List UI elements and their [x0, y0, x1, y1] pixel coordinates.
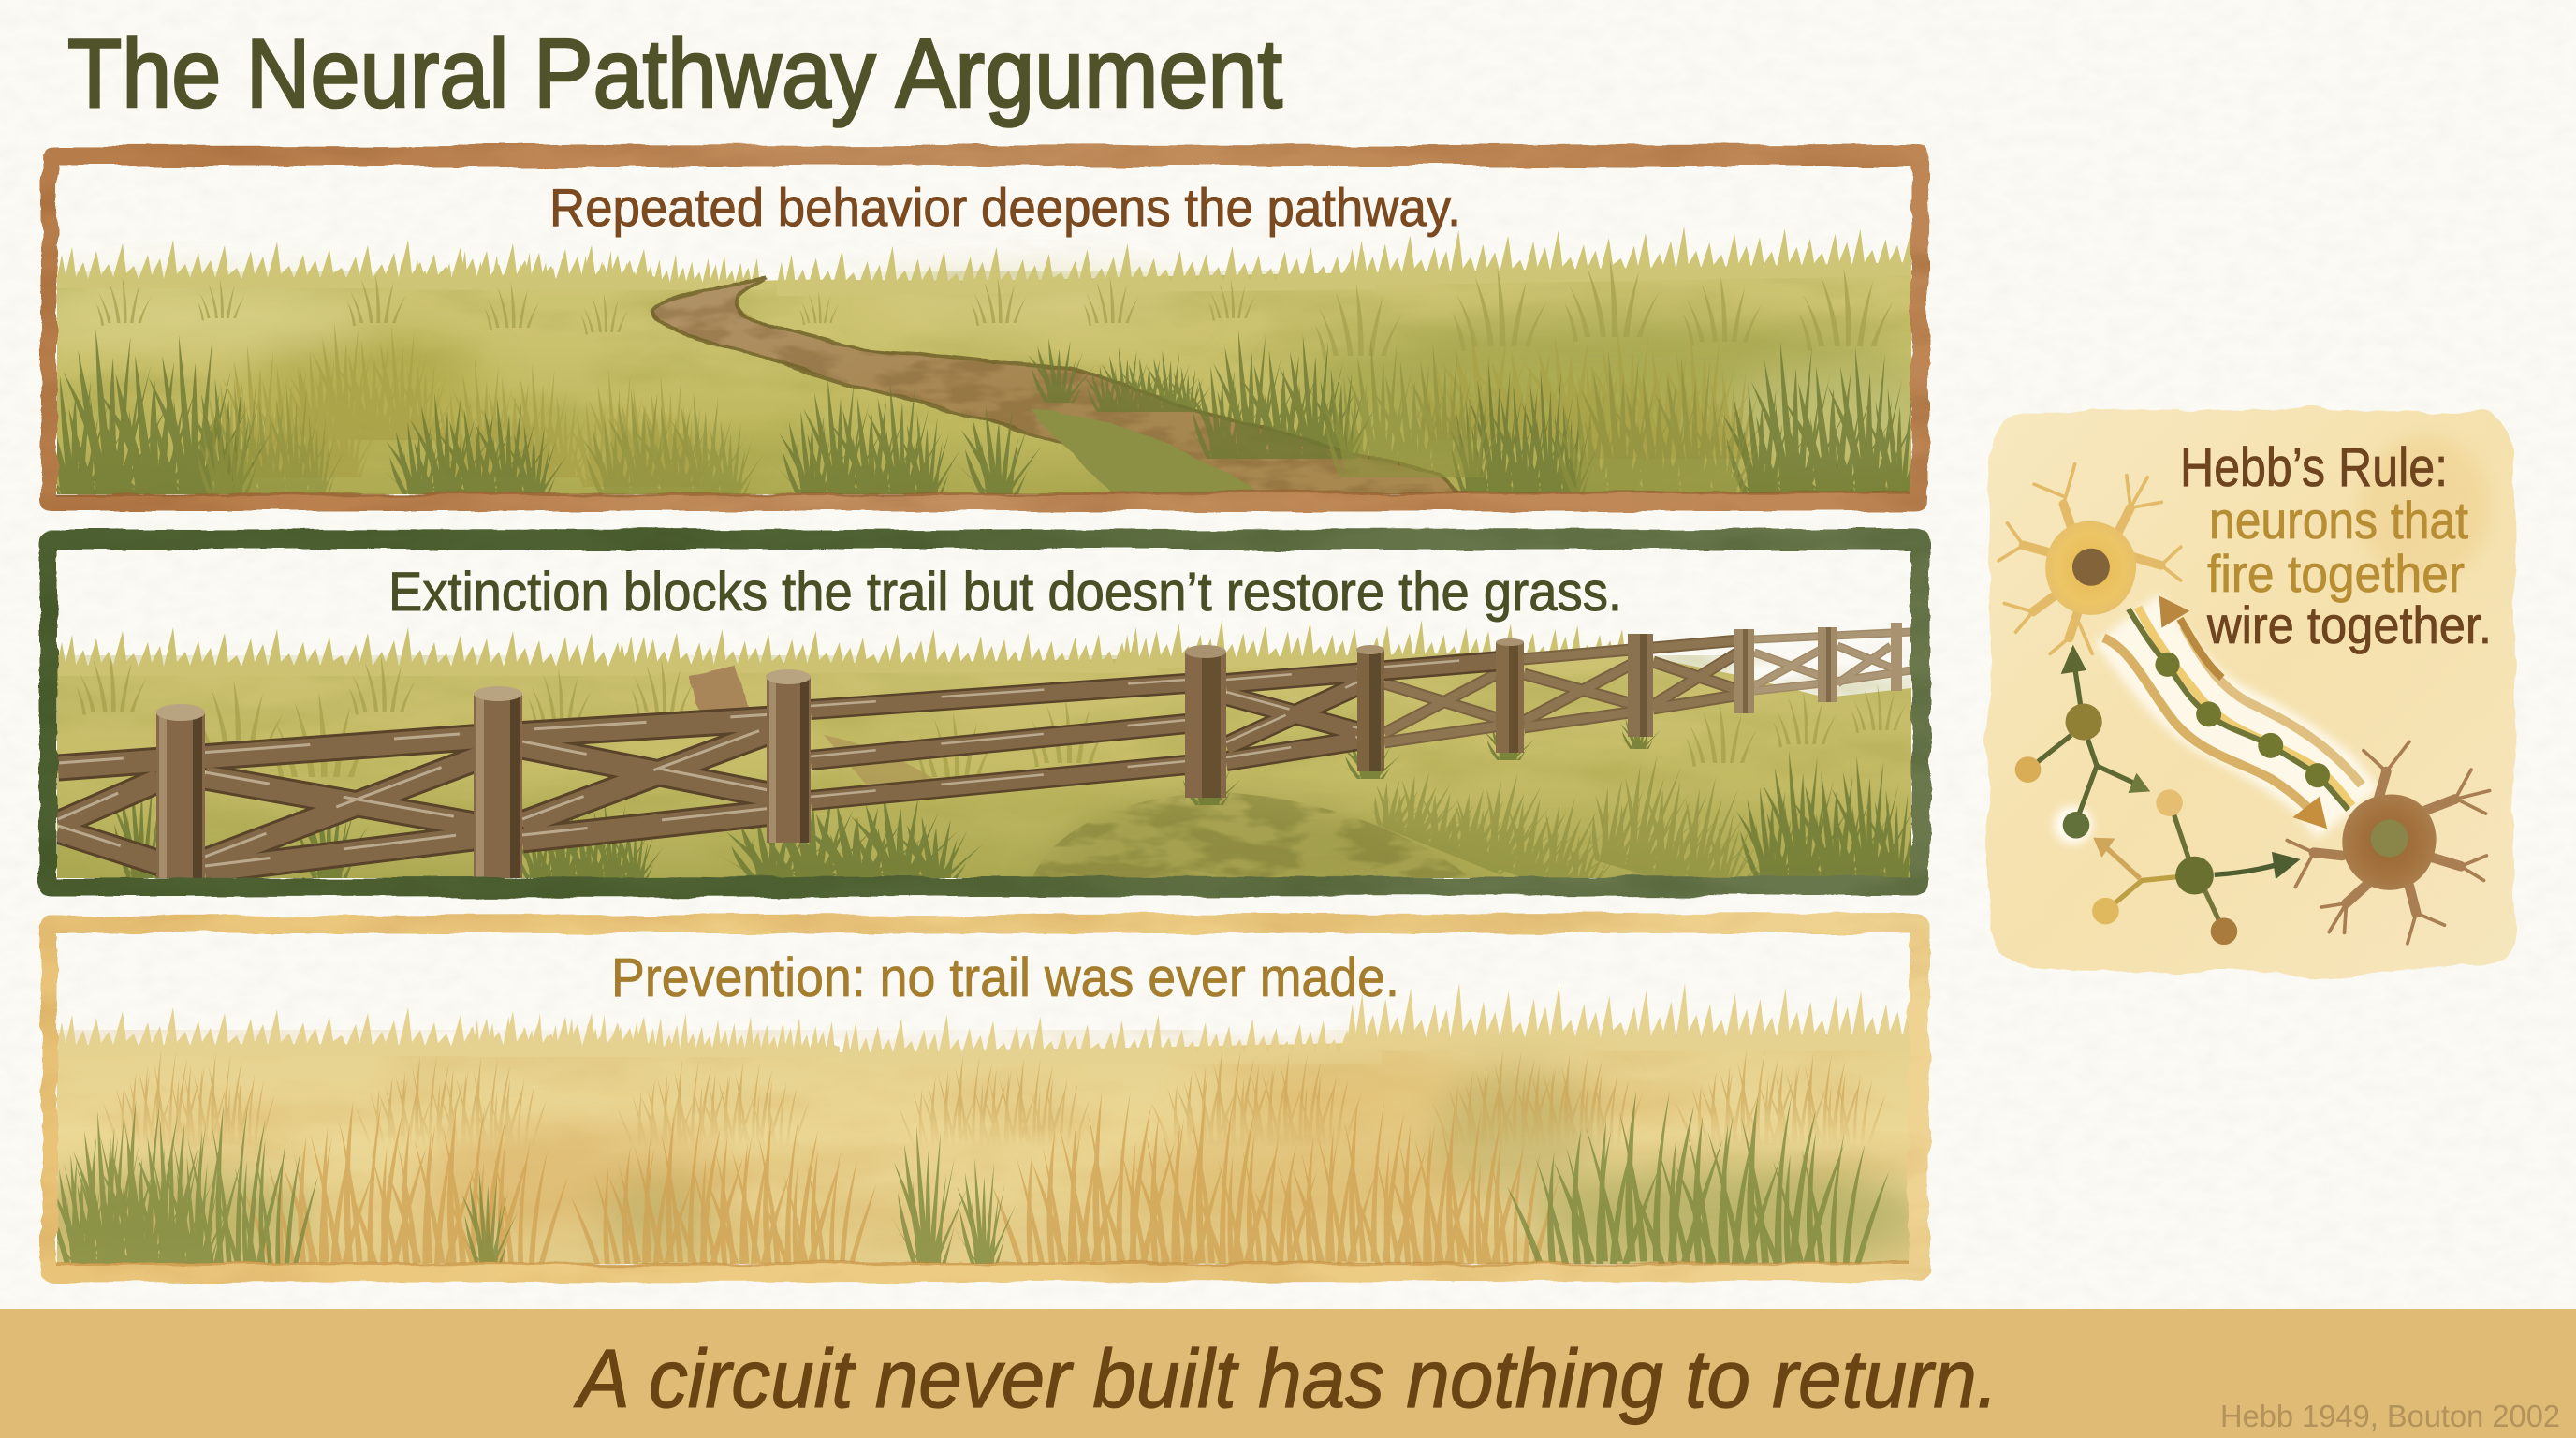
caption: Repeated behavior deepens the pathway.	[549, 178, 1461, 238]
fence posts	[156, 623, 1902, 878]
Hebb's rule text: fire together	[2207, 544, 2465, 603]
neuron: lower brown cell	[2287, 741, 2490, 944]
parchment wash	[1986, 409, 2516, 980]
arrow: backward signal	[2159, 595, 2362, 785]
Hebb's rule text: neurons that	[2209, 491, 2468, 550]
footer band	[0, 1309, 2576, 1438]
neuron diagram	[1998, 435, 2490, 945]
arrow: forward signal	[2103, 638, 2327, 829]
Hebb's rule text: Hebb’s Rule:	[2180, 437, 2448, 498]
frame: golden wash border	[41, 913, 1929, 1283]
golden untouched grass	[28, 983, 1928, 1269]
panel: repeated behavior deepens the pathway	[0, 144, 1947, 511]
Hebb's rule text: wire together.	[2206, 595, 2492, 654]
frame: brown wash border	[41, 144, 1928, 511]
Hebb's rule text	[2180, 437, 2492, 654]
caption: Prevention: no trail was ever made.	[611, 947, 1399, 1008]
axon with nodes	[2129, 608, 2352, 810]
frame: green wash border	[39, 529, 1930, 897]
fence rails	[58, 632, 1911, 871]
citation: Hebb 1949, Bouton 2002	[2220, 1399, 2560, 1433]
wooden fence	[58, 623, 1911, 878]
panel: prevention, no trail	[28, 913, 1929, 1283]
small network: lower	[2092, 789, 2301, 945]
title: The Neural Pathway Argument	[67, 20, 1282, 128]
neuron: upper golden cell	[1998, 464, 2181, 653]
panel: Hebb's rule	[1986, 409, 2516, 980]
small network: left	[2015, 645, 2150, 839]
panel: extinction blocks the trail	[39, 529, 1933, 909]
grass meadow behind fence	[57, 620, 1911, 878]
takeaway statement: A circuit never built has nothing to return.	[573, 1332, 1998, 1425]
grass meadow with worn trail	[0, 222, 1947, 496]
caption: Extinction blocks the trail but doesn’t restore the grass.	[388, 562, 1622, 623]
